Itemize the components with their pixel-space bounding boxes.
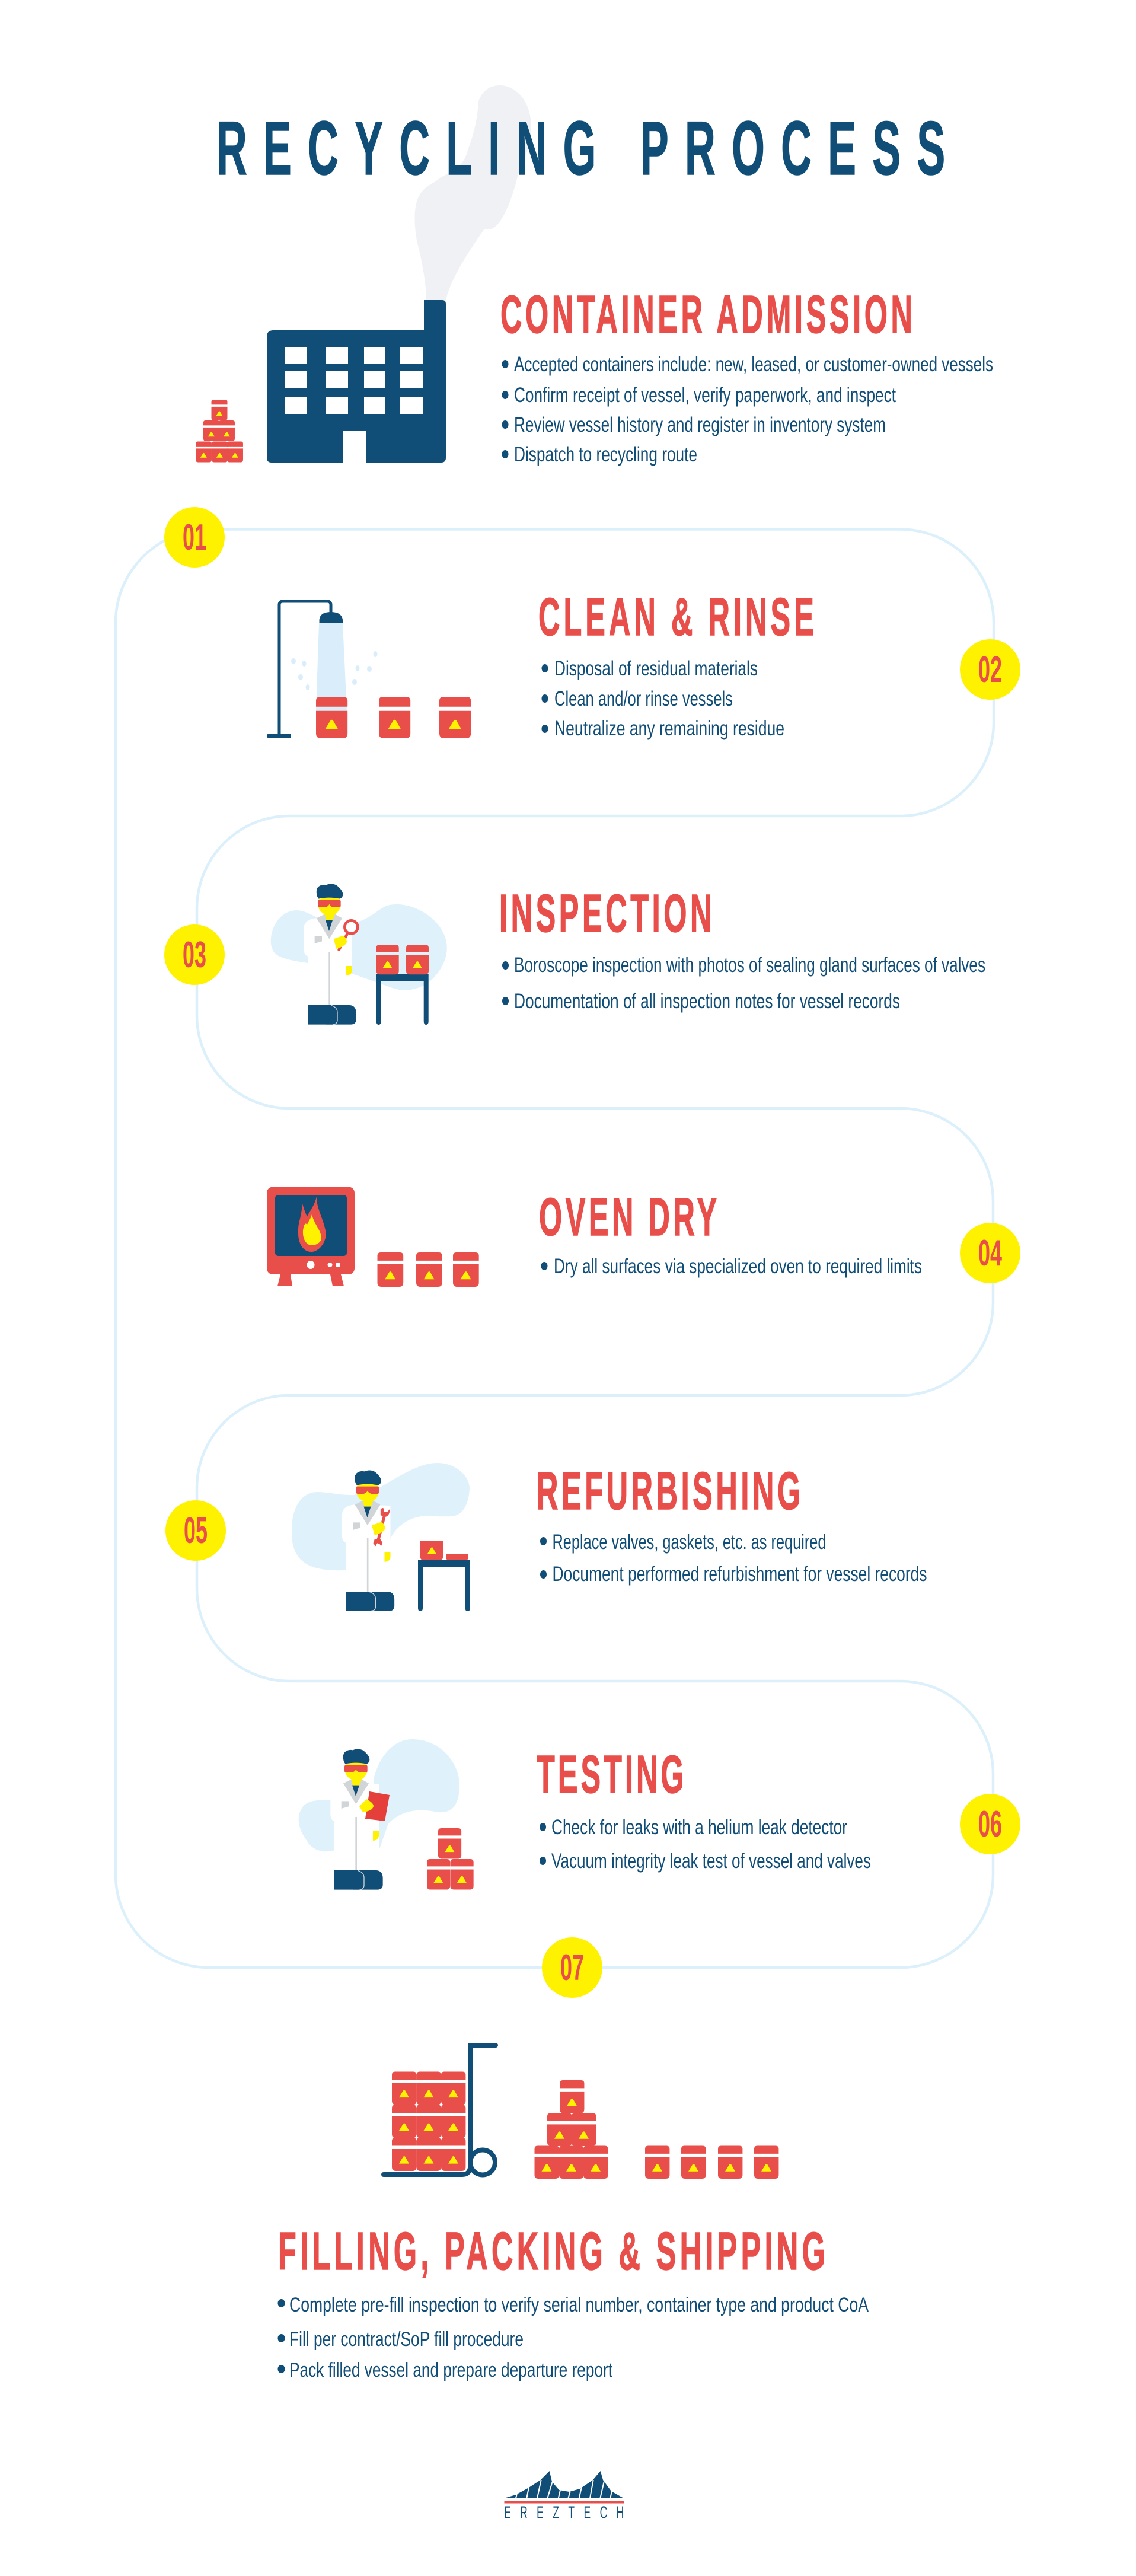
step badge 02: [960, 639, 1020, 700]
bullet list: Document performed refurbishment for vessel records: [553, 1563, 927, 1586]
step badge 05: [165, 1500, 226, 1561]
panel: oven dry: [267, 1187, 922, 1287]
panel: container admission: [196, 285, 993, 466]
process path: [116, 529, 994, 1968]
bullet list: Review vessel history and register in inventory system: [514, 413, 886, 436]
bullet list: Disposal of residual materials: [554, 657, 758, 680]
bullet list: Pack filled vessel and prepare departure report: [289, 2359, 612, 2381]
illustration: inspector: [271, 884, 447, 1025]
step badge 07: [542, 1937, 602, 1998]
bullet list: [542, 657, 784, 740]
bullet list: Documentation of all inspection notes for vessel records: [514, 990, 900, 1013]
icon: stacked cans: [196, 400, 243, 463]
bullet list: [502, 954, 985, 1013]
bullet list: [502, 353, 993, 466]
logo: Ereztech: [504, 2471, 624, 2523]
panel: refurbishing: [292, 1462, 927, 1611]
heading: CONTAINER ADMISSION: [500, 285, 912, 345]
illustration: tester with clipboard: [299, 1739, 459, 1890]
bullet list: Clean and/or rinse vessels: [554, 687, 733, 710]
icon: can row: [645, 2145, 778, 2179]
step badge 01: [164, 507, 225, 568]
bullet list: Vacuum integrity leak test of vessel and valves: [551, 1850, 871, 1873]
icon: hand truck with cans: [384, 2045, 496, 2175]
icon: can pyramid: [535, 2080, 608, 2179]
icon: stacked cans: [427, 1828, 474, 1889]
logo: Ereztech: EREZTECH: [504, 2503, 624, 2523]
step badge 06: [960, 1794, 1020, 1854]
bullet list: Check for leaks with a helium leak detector: [551, 1816, 847, 1839]
icon: table with open can: [418, 1541, 470, 1611]
heading: TESTING: [537, 1745, 684, 1805]
icon: shower: [267, 601, 377, 738]
panel: inspection: [271, 884, 985, 1025]
bullet list: Confirm receipt of vessel, verify paperwork, and inspect: [514, 384, 896, 407]
icon: factory: [267, 300, 446, 463]
heading: INSPECTION: [499, 884, 711, 943]
heading: OVEN DRY: [539, 1188, 717, 1247]
step badge 02: 02: [978, 649, 1002, 690]
heading: FILLING, PACKING & SHIPPING: [278, 2222, 825, 2281]
bullet list: [540, 1531, 927, 1586]
icon: cans: [377, 1252, 479, 1287]
bullet list: [277, 2294, 869, 2381]
bullet list: [540, 1816, 871, 1873]
factory smoke: [414, 85, 531, 300]
bullet list: Fill per contract/SoP fill procedure: [289, 2328, 524, 2351]
step badge 06: 06: [978, 1803, 1002, 1844]
step badge 07: 07: [560, 1947, 584, 1988]
title: RECYCLING PROCESS: [216, 106, 945, 190]
panel: filling, packing and shipping: [277, 2045, 869, 2381]
icon: oven: [267, 1187, 355, 1286]
step badge 04: 04: [978, 1232, 1002, 1273]
icon: cans: [316, 697, 471, 738]
step badge 05: 05: [184, 1510, 208, 1551]
step badge 01: 01: [183, 517, 206, 557]
step badge 03: 03: [183, 934, 206, 975]
heading: CLEAN & RINSE: [538, 588, 814, 647]
bullet list: Dispatch to recycling route: [514, 443, 697, 466]
panel: clean and rinse: [267, 588, 814, 740]
bullet list: Replace valves, gaskets, etc. as required: [553, 1531, 827, 1554]
illustration: technician with wrench: [292, 1463, 470, 1611]
bullet list: Neutralize any remaining residue: [554, 717, 784, 740]
heading: REFURBISHING: [537, 1462, 800, 1521]
bullet list: Complete pre-fill inspection to verify serial number, container type and product CoA: [289, 2294, 869, 2316]
step badge 04: [960, 1223, 1020, 1283]
bullet list: Boroscope inspection with photos of sealing gland surfaces of valves: [514, 954, 985, 977]
panel: testing: [299, 1739, 871, 1890]
step badge 03: [164, 924, 225, 985]
bullet: Dry all surfaces via specialized oven to required limits: [554, 1255, 922, 1278]
icon: table with cans: [376, 945, 429, 1025]
